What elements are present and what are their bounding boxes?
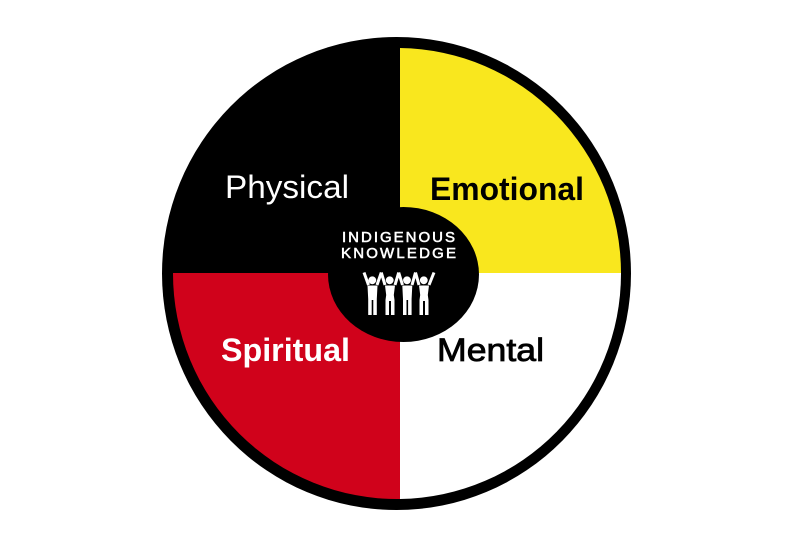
label: Physical: Physical [225, 169, 349, 205]
person 4 [419, 276, 429, 315]
quadrant: Spiritual red [173, 273, 400, 499]
icon: four people with raised joined hands [364, 272, 434, 315]
centre heading: INDIGENOUS [342, 229, 455, 246]
label: Spiritual: Spiritual [221, 332, 350, 368]
centre ellipse [328, 207, 479, 342]
quadrant: Emotional yellow [400, 48, 621, 273]
person 3 [402, 276, 412, 315]
person 2 [385, 276, 395, 315]
quadrant: Mental white [400, 273, 621, 499]
wheel outer ring [162, 37, 631, 510]
person 1 [368, 276, 378, 315]
centre heading: KNOWLEDGE [341, 245, 456, 262]
arms [364, 272, 434, 285]
centre heading [341, 229, 456, 262]
label: Emotional: Emotional [430, 171, 584, 207]
label: Mental: Mental [437, 332, 544, 368]
